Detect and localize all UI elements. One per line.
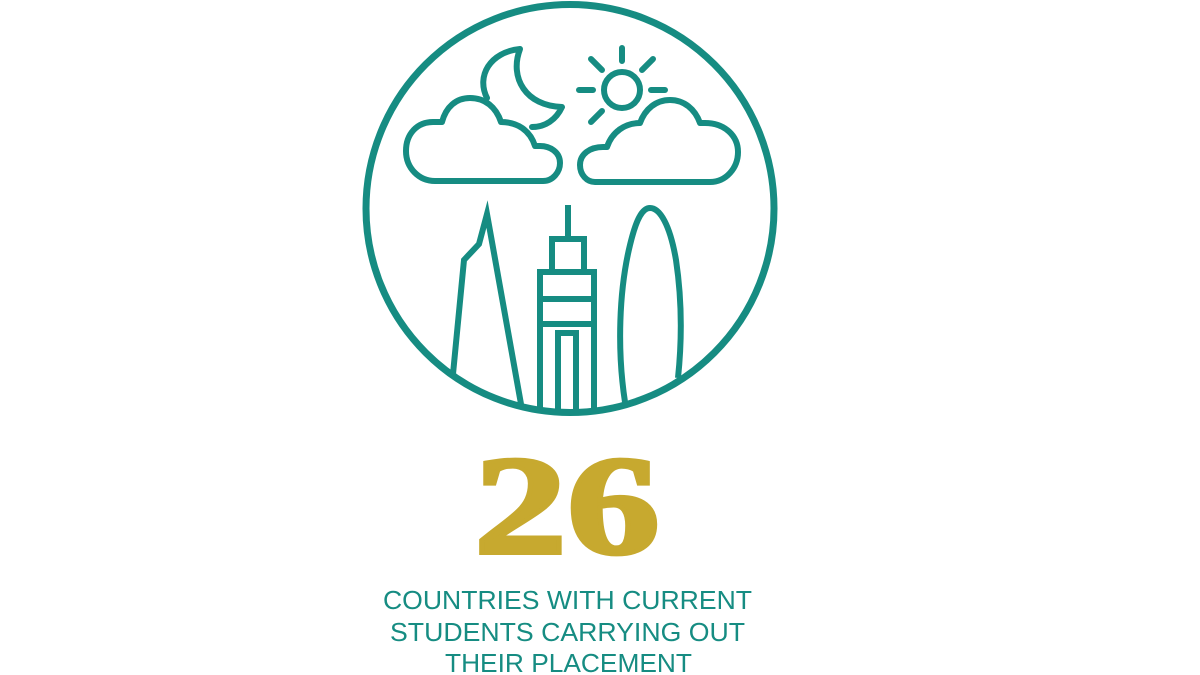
- icon: sun: [579, 48, 665, 122]
- emblem: day and night city: [366, 4, 774, 412]
- icon: rounded tower: [620, 208, 681, 402]
- icon: pointed tower: [453, 214, 521, 404]
- icon: right cloud: [580, 100, 738, 182]
- icon: left cloud: [406, 98, 560, 181]
- icon: stepped skyscraper: [540, 205, 594, 410]
- caption: STUDENTS CARRYING OUT: [390, 617, 745, 647]
- big number: 26: [474, 428, 660, 584]
- emblem ring: [366, 4, 774, 412]
- icon: moon: [483, 49, 562, 127]
- caption: COUNTRIES WITH CURRENT: [383, 585, 752, 615]
- caption: [383, 585, 752, 675]
